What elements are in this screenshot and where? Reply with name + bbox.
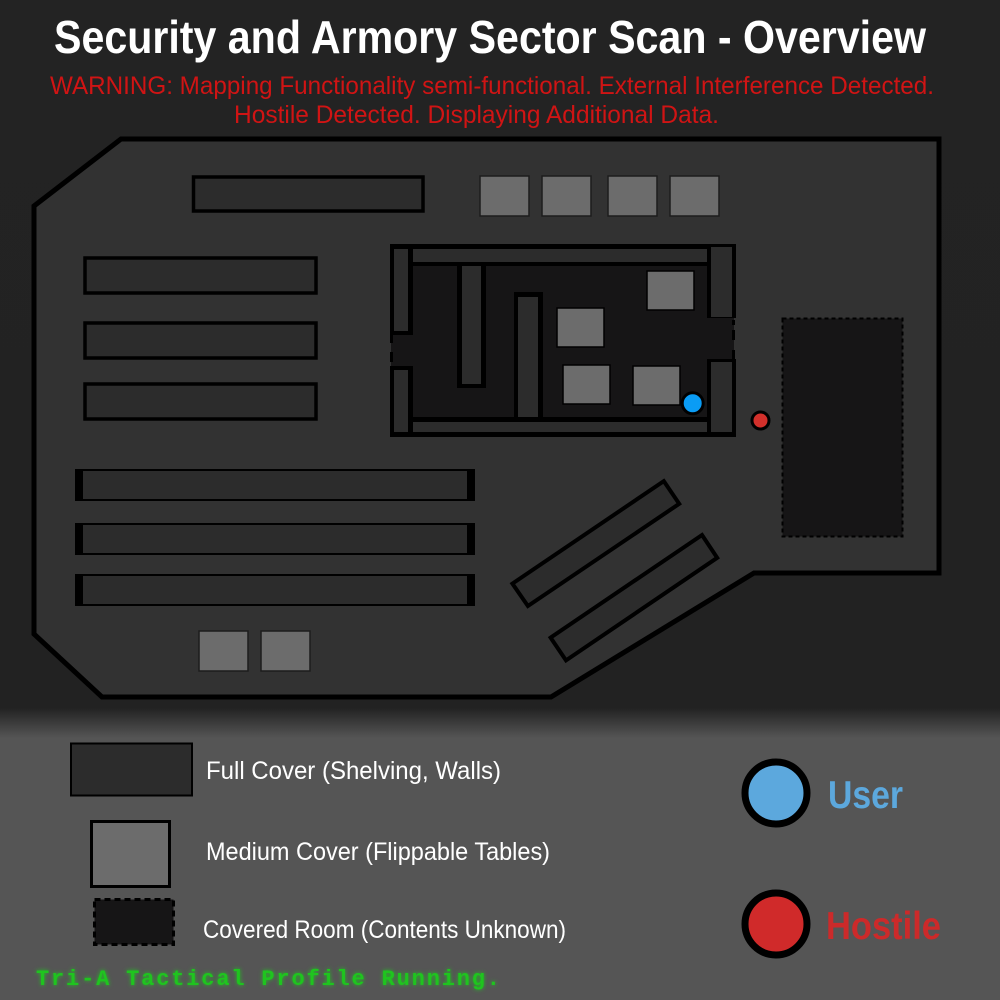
legend: user (745, 762, 903, 824)
full cover shelves upper left (85, 177, 423, 419)
hostile marker (752, 412, 769, 429)
legend: hostile (745, 893, 941, 955)
status line: Tri-A Tactical Profile Running. (36, 967, 500, 992)
legend (71, 744, 941, 955)
armory interior shelves (457, 262, 543, 419)
floor plan outline (34, 139, 939, 697)
legend: medium cover (92, 822, 550, 886)
warning text: Hostile Detected. Displaying Additional Data. (234, 101, 719, 129)
full cover shelves lower left (75, 469, 475, 606)
warning text: WARNING: Mapping Functionality semi-functional. External Interference Detected. (50, 72, 934, 100)
sector map (34, 139, 939, 697)
armory west door (390, 335, 413, 366)
warning text (50, 72, 934, 129)
legend: hostile: Hostile (826, 905, 941, 948)
armory room (390, 244, 736, 437)
legend: user: User (828, 774, 903, 817)
medium cover tables bottom (199, 631, 310, 671)
title: Security and Armory Sector Scan - Overview (54, 11, 926, 63)
covered room (782, 318, 902, 536)
armory east door (707, 318, 735, 359)
medium cover tables top row (480, 176, 719, 216)
legend: covered room: Covered Room (Contents Unknown) (203, 916, 566, 944)
legend: full cover: Full Cover (Shelving, Walls) (206, 757, 501, 785)
legend: medium cover: Medium Cover (Flippable Tables) (206, 838, 550, 866)
armory tables (557, 271, 694, 405)
user marker (682, 393, 703, 414)
legend: full cover (71, 744, 501, 796)
diagonal shelves (512, 481, 717, 660)
legend: covered room (94, 900, 566, 944)
armory walls (390, 244, 736, 437)
